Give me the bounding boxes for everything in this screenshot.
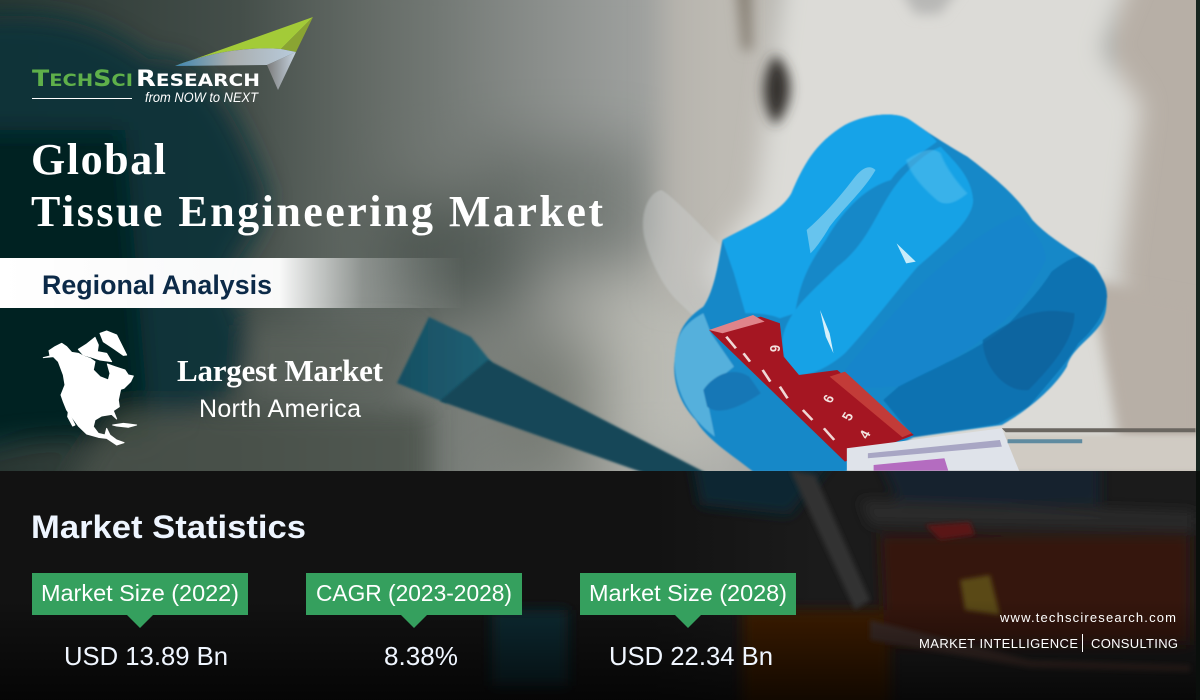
stat: market size 2028: USD 22.34 Bn bbox=[609, 641, 773, 671]
footer: website and services: www.techsciresearch.com bbox=[999, 610, 1176, 625]
footer: website and services: MARKET INTELLIGENCE bbox=[919, 636, 1078, 651]
glove, red tube and dish bbox=[643, 115, 1195, 472]
regional analysis band bbox=[0, 258, 465, 308]
stat: market size 2022: Market Size (2022) bbox=[41, 580, 239, 606]
bottom statistics panel bbox=[0, 450, 1200, 700]
logo underline bbox=[32, 98, 132, 99]
stat: CAGR bbox=[306, 573, 522, 671]
title bbox=[31, 135, 603, 236]
tube number 9: 9 bbox=[767, 345, 783, 352]
largest market callout: Largest Market bbox=[177, 353, 384, 388]
logo wordmark second word: RESEARCH bbox=[136, 67, 260, 92]
left side dark gradient overlay bbox=[0, 0, 1200, 480]
regional analysis band: Regional Analysis bbox=[42, 270, 272, 300]
stat: CAGR: 8.38% bbox=[384, 641, 458, 671]
logo arrow mark bbox=[175, 17, 313, 90]
stat: market size 2022: USD 13.89 Bn bbox=[64, 641, 228, 671]
largest market callout bbox=[177, 353, 384, 423]
title: Tissue Engineering Market bbox=[31, 187, 603, 236]
stat: market size 2028 bbox=[580, 573, 796, 671]
footer: website and services: CONSULTING bbox=[1091, 636, 1178, 651]
stat: CAGR: CAGR (2023-2028) bbox=[316, 580, 512, 606]
logo wordmark: TECH SCI bbox=[32, 67, 133, 92]
stat: market size 2028: Market Size (2028) bbox=[589, 580, 787, 606]
tube number 4: 4 bbox=[856, 428, 874, 441]
largest market callout: North America bbox=[199, 395, 361, 423]
logo: TechSci Research bbox=[32, 17, 313, 105]
tube number 6: 6 bbox=[820, 392, 838, 405]
tube number 5: 5 bbox=[839, 410, 857, 423]
pipette bbox=[397, 317, 710, 475]
heading: market statistics: Market Statistics bbox=[31, 509, 306, 545]
icon: North America map bbox=[43, 331, 137, 445]
stat: market size 2022 bbox=[32, 573, 248, 671]
title: Global bbox=[31, 135, 166, 184]
footer: website and services bbox=[919, 610, 1178, 652]
logo tagline: from NOW to NEXT bbox=[145, 89, 259, 105]
